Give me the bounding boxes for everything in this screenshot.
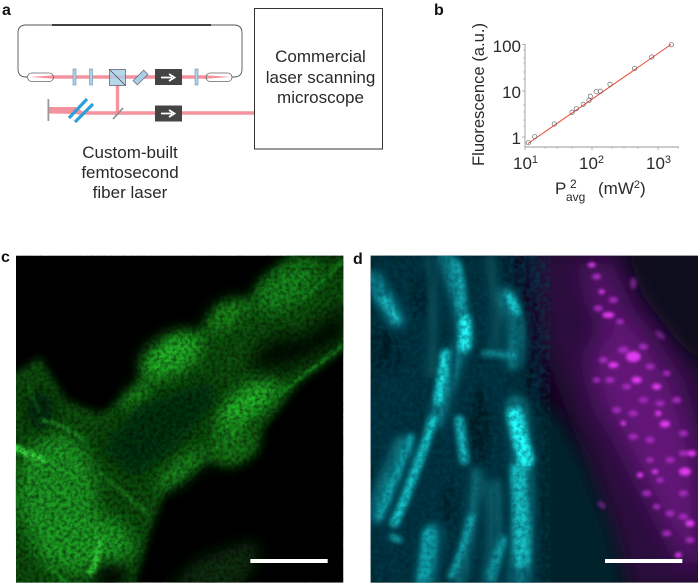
dark upper right: [627, 250, 700, 367]
optical isolator 1: [155, 69, 182, 85]
laser caption: Custom-built: [82, 143, 178, 162]
optical isolator 2: [155, 106, 182, 122]
x tick labels: [513, 154, 671, 173]
x axis title: avg: [566, 190, 585, 204]
panel: b fluorescence log-log chart: [434, 2, 679, 204]
panel label c: c: [1, 249, 10, 266]
cellular grain texture: [16, 256, 343, 583]
x tick labels: 2: [598, 154, 604, 166]
y axis title: Fluorescence (a.u.): [469, 23, 488, 166]
panel: a laser setup schematic: [2, 2, 382, 202]
left collimator: [28, 73, 54, 82]
laser caption: [81, 143, 179, 202]
cavity laser beam: [30, 75, 230, 79]
microscope box: laser scanning: [266, 68, 375, 87]
wide pulse compressor beam: [49, 107, 82, 115]
panel: d cyan and magenta micrograph: [363, 247, 700, 585]
scale bar c: [250, 559, 328, 563]
microscope box: microscope: [277, 88, 364, 107]
dark gaps: [373, 270, 489, 522]
fiber cavity loop: [18, 25, 242, 77]
y tick labels: 10: [502, 83, 521, 102]
waveplates: [73, 69, 198, 85]
dim outlying cells: [596, 277, 667, 510]
x tick labels: 10: [579, 154, 598, 173]
x tick labels: 10: [513, 154, 532, 173]
lit epithelial lobes: [17, 251, 327, 573]
x axis title: 2: [570, 177, 577, 191]
laser caption: femtosecond: [81, 163, 179, 182]
gain fiber segment: [52, 24, 211, 26]
magenta bright cells: [588, 263, 696, 558]
tilted birefringent plate: [133, 70, 148, 85]
panel label d: d: [353, 251, 363, 268]
panel label a: a: [2, 2, 11, 19]
mottled fibre texture: [371, 256, 534, 583]
x tick labels: 3: [665, 154, 671, 166]
diffraction gratings: [69, 99, 93, 122]
data points: [526, 42, 674, 145]
purple background: [530, 247, 700, 585]
fibre streak texture: [371, 256, 527, 583]
x axis title: [555, 177, 646, 204]
x axis title: ): [640, 179, 646, 198]
x tick labels: 1: [532, 154, 538, 166]
lower fragment: [167, 542, 263, 585]
bright fibres: [16, 260, 343, 583]
x axis title: 2: [634, 179, 640, 191]
microscope box: [254, 8, 382, 149]
laser caption: fiber laser: [93, 183, 168, 202]
fit line: [528, 44, 671, 144]
pick-off mirror: [113, 108, 123, 119]
polarising beam splitter cube: [110, 70, 126, 86]
teal base: [363, 250, 532, 585]
axis ticks: [522, 44, 678, 150]
x axis title: (mW: [598, 179, 634, 198]
x axis title: P: [555, 179, 566, 198]
x tick labels: 10: [646, 154, 665, 173]
bright cyan streaks: [378, 263, 526, 577]
microscope box: Commercial: [275, 47, 366, 66]
tissue base: [10, 255, 350, 585]
dark interior patches: [27, 303, 347, 585]
panel: c green fluorescence micrograph: [10, 251, 350, 585]
fibre bundles: [373, 257, 523, 580]
axes: [525, 44, 679, 147]
y tick labels: [493, 37, 521, 148]
y tick labels: 100: [493, 37, 521, 56]
y tick labels: 1: [512, 129, 521, 148]
right collimator: [206, 73, 232, 82]
magenta cell layer glow: [583, 263, 700, 567]
output beam path: [78, 85, 254, 113]
magenta cells: [592, 274, 695, 543]
end mirror: [48, 99, 49, 121]
panel label b: b: [434, 2, 444, 19]
dark teal right haze: [523, 400, 627, 585]
scale bar d: [605, 559, 682, 563]
